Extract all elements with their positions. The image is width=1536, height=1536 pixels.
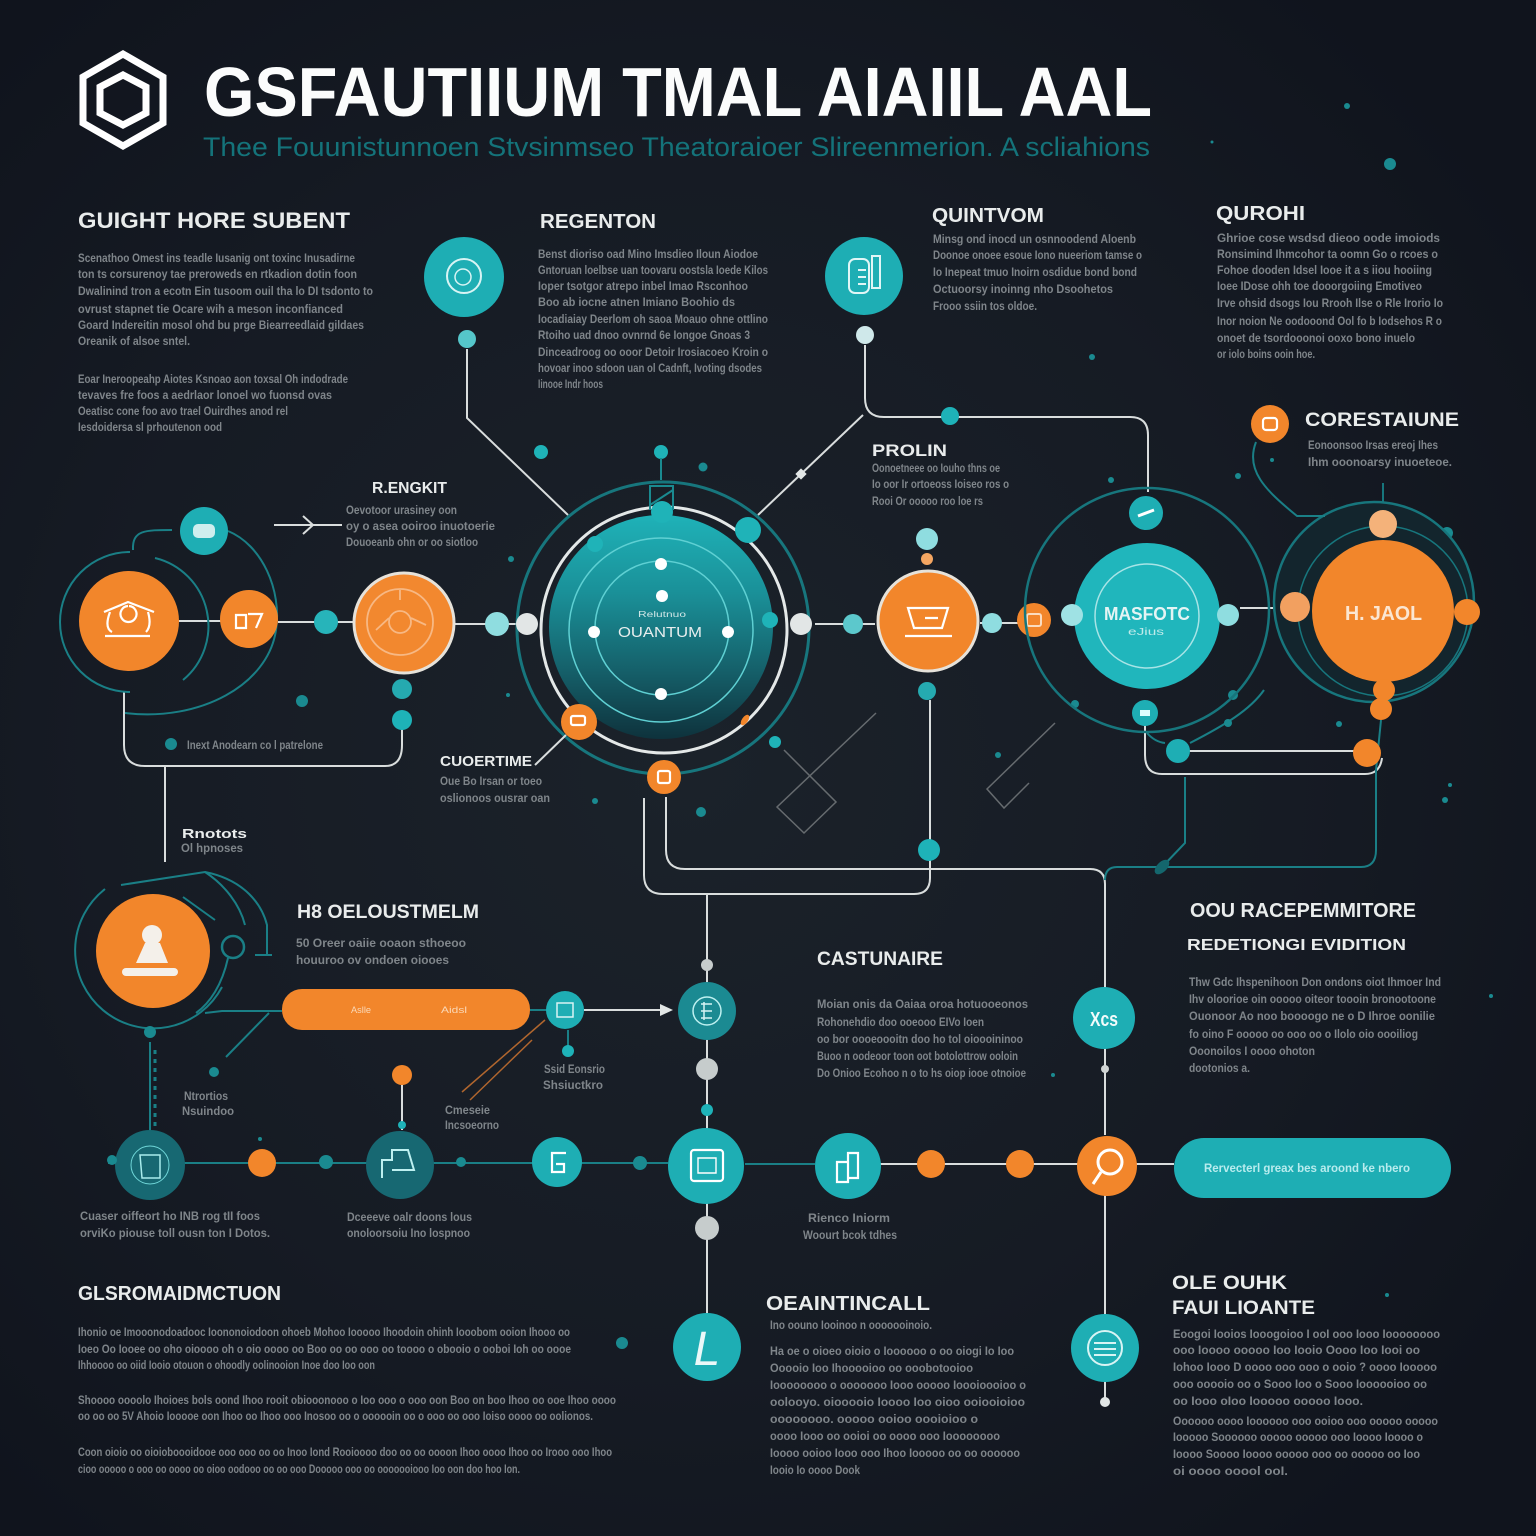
panel: oeaintincall	[766, 1293, 1026, 1477]
heading: PROLIN	[872, 441, 947, 460]
label: dceeeve: onoloorsoiu Ino lospnoo	[347, 1228, 470, 1240]
body: Ioooooooo o ooooooo Iooo ooooo Ioooioooioo o	[770, 1380, 1026, 1392]
body: oooooooo. ooooo ooioo oooioioo o	[770, 1414, 978, 1426]
label: cuaser: Cuaser oiffeort ho INB rog tII foos	[80, 1211, 260, 1223]
icon: house	[104, 602, 154, 636]
label: rienco: Rienco Iniorm	[808, 1213, 890, 1225]
panel: lower left node	[75, 826, 272, 1038]
body text: Iinooe Indr hoos	[538, 379, 603, 391]
body: dootonios a.	[1189, 1063, 1250, 1075]
heading: QUINTVOM	[932, 205, 1044, 227]
inner ring	[1095, 564, 1199, 668]
body	[817, 999, 1028, 1080]
body text: Doonoe onoee esoue Iono nueeriom tamse o	[933, 250, 1142, 262]
label: cmeseie: Cmeseie	[445, 1105, 490, 1117]
orange disc	[1312, 540, 1454, 682]
body: Eonoonsoo Irsas ereoj Ihes	[1308, 440, 1438, 452]
label: ntrortios	[182, 1091, 234, 1118]
small labels around flow row	[80, 1064, 897, 1242]
subtitle: Thee Fouunistunnoen Stvsinmseo Theatoraioer Slireenmerion. A scliahions	[203, 132, 1150, 162]
body: Oue Bo Irsan or toeo	[440, 776, 542, 788]
heading: R.ENGKIT	[372, 480, 447, 497]
label: cmeseie	[445, 1105, 499, 1132]
icon: teal	[193, 524, 215, 538]
body text: Boo ab iocne atnen Imiano Boohio ds	[538, 297, 735, 309]
title: GSFAUTIIUM TMAL AIAIIL AAL	[204, 53, 1152, 131]
heading: GUIGHT HORE SUBENT	[78, 208, 351, 233]
heading: QUROHI	[1216, 203, 1305, 225]
label: dceeeve	[347, 1212, 472, 1240]
panel: castunaire	[817, 949, 1028, 1080]
caption: Inext Anodearn co l patrelone	[187, 740, 323, 752]
node 2	[366, 1121, 434, 1199]
icon glyph	[1263, 418, 1277, 430]
heading: OEAINTINCALL	[766, 1293, 930, 1315]
label: ssid: Shsiuctkro	[543, 1080, 603, 1092]
heading: GLSROMAIDMCTUON	[78, 1283, 281, 1305]
body: Ihm ooonoarsy inuoeteoe.	[1308, 457, 1452, 469]
body: oo oo oo 5V Ahoio Iooooe oon Ihoo oo Ihoo ooo Inosoo oo o oooooin oo o ooo oo ooo Ioiso oooo oo oolionos.	[78, 1411, 593, 1423]
teal node	[180, 507, 228, 555]
magnifier node	[1077, 1136, 1137, 1196]
orange pill	[282, 989, 530, 1030]
connector	[1253, 442, 1325, 516]
heading: REGENTON	[540, 211, 656, 233]
connector lines	[108, 345, 1382, 1402]
center label: OUANTUM	[618, 624, 702, 641]
icon: hexagon logo	[83, 54, 163, 146]
body text: Scenathoo Omest ins teadle Iusanig ont toxinc Inusadirne	[78, 253, 355, 265]
orange node left	[561, 704, 597, 740]
label: H. JAOL	[1345, 603, 1422, 625]
label: ntrortios: Nsuindoo	[182, 1106, 234, 1118]
body text: Rtoiho uad dnoo ovnrnd 6e Iongoe Gnoas 3	[538, 330, 750, 342]
body text: ovrust stapnet tie Ocare wih a meson inconfianced	[78, 304, 343, 316]
body: Oonoetneee oo Iouho thns oe	[872, 463, 1000, 475]
body text	[538, 249, 768, 391]
small teal nodes	[534, 445, 781, 748]
body: Ha oe o oioeo oioio o Ioooooo o oo oiogi Io Ioo	[770, 1346, 1014, 1358]
satellites	[1061, 496, 1381, 767]
body text	[1217, 233, 1443, 361]
bottom joint	[144, 1026, 156, 1038]
body: Oooooo oooo Ioooooo ooo ooioo ooo ooooo ooooo	[1173, 1416, 1438, 1428]
panel: quintvom	[932, 205, 1142, 313]
body: Moian onis da Oaiaa oroa hotuooeonos	[817, 999, 1028, 1011]
dark band and outer ring	[1274, 502, 1474, 702]
node 1	[107, 1130, 185, 1200]
dots on rings	[588, 558, 734, 700]
subline: Ino oouno Iooinoo n ooooooinoio.	[770, 1320, 932, 1332]
label: ssid	[543, 1064, 605, 1092]
orange circle	[878, 571, 978, 671]
body: Ihhoooo oo oiid Iooio otouon o ohoodly oolinooion Inoe doo Ioo oon	[78, 1360, 375, 1372]
caption: rnotots: Rnotots	[182, 826, 247, 841]
body text: hovoar inoo sdoon uan ol Cadnft, Ivoting dsodes	[538, 363, 762, 375]
caption: rnotots: Ol hpnoses	[181, 843, 243, 855]
body text: Dwalinind tron a ecotn Ein tusoom ouil tha lo DI tsdonto to	[78, 286, 373, 298]
body text	[78, 253, 373, 434]
heading: CASTUNAIRE	[817, 949, 943, 970]
white junctions	[516, 468, 812, 635]
text: prolin	[872, 441, 1009, 508]
label: cmeseie: Incsoeorno	[445, 1120, 499, 1132]
inner rings	[569, 538, 753, 722]
label: rienco	[803, 1213, 897, 1242]
body: Buoo n oodeoor toon oot botolottrow ooloin	[817, 1051, 1018, 1063]
body text: Ioee IDose ohh toe dooorgoiing Emotiveo	[1217, 281, 1422, 293]
body	[346, 505, 495, 549]
caption: rnotots	[181, 826, 247, 855]
node 3	[532, 1137, 582, 1187]
panel: ole ouhk	[1172, 1273, 1440, 1478]
node: script letter: L	[694, 1323, 720, 1376]
icon: small orange	[236, 614, 262, 628]
scattered dots	[165, 103, 1493, 1349]
panel: corestaiune	[1251, 405, 1459, 516]
body: Ihonio oe Imooonodoadooc Ioononoiodoon ohoeb Mohoo Iooooo Ihoodoin ohinh Iooobom ooion Ihooo oo	[78, 1327, 570, 1339]
panel: qurohi	[1216, 203, 1443, 361]
body: Ooonoilos I oooo ohoton	[1189, 1046, 1315, 1058]
heading: CORESTAIUNE	[1305, 410, 1459, 431]
node 4 hub	[668, 1128, 744, 1204]
label: rienco: Woourt bcok tdhes	[803, 1230, 897, 1242]
teal disc	[1074, 543, 1220, 689]
body text: Goard Indereitin mosol ohd bu prge Biearreedlaid gildaes	[78, 320, 364, 332]
orange node	[1017, 603, 1051, 637]
text: h8 oeloustmelm	[296, 902, 479, 967]
body text: Minsg ond inocd un osnnoodend Aloenb	[933, 234, 1136, 246]
ring	[1025, 488, 1269, 732]
orange dots	[917, 1150, 945, 1178]
body text: Iesdoidersa sl prhoutenon ood	[78, 422, 222, 434]
body: Ioooo Soooo Ioooo ooooo ooo oo ooooo oo Ioo	[1173, 1449, 1420, 1461]
body: Rooi Or ooooo roo loe rs	[872, 496, 983, 508]
body: Ioooo ooioo Iooo ooo Ihoo Iooooo oo oo oooooo	[770, 1448, 1020, 1460]
label: MASFOTC	[1104, 604, 1190, 624]
panel: regenton	[538, 211, 768, 391]
label: dceeeve: Dceeeve oalr doons lous	[347, 1212, 472, 1224]
heading: OOU RACEPEMMITORE	[1190, 900, 1416, 922]
body text: Eoar Ineroopeahp Aiotes Ksnoao aon toxsal Oh indodrade	[78, 374, 348, 386]
body text: Oeatisc cone foo avo trael Ouirdhes anod rel	[78, 406, 288, 418]
connector dots	[314, 610, 509, 730]
teal pill: Rervecterl greax bes aroond ke nbero	[1204, 1163, 1410, 1175]
body: oslionoos ousrar oan	[440, 793, 550, 805]
sub label: eJius	[1128, 627, 1164, 638]
node: script letter	[673, 1313, 741, 1381]
icon: person	[122, 925, 178, 976]
body: Io oor Ir ortoeoss Ioiseo ros o	[872, 479, 1009, 491]
orange disc	[96, 894, 210, 1008]
panel: left node cluster	[60, 507, 509, 752]
body: Ooooio Ioo Ihooooioo oo ooobotooioo	[770, 1363, 973, 1375]
body: Ihv oloorioe oin ooooo oiteor toooin bronootoone	[1189, 994, 1436, 1006]
orange icon node	[1251, 405, 1289, 443]
small label: Relutnuo	[638, 610, 687, 619]
body: Rohonehdio doo ooeooo EIVo Ioen	[817, 1017, 984, 1029]
body: Iooooo Soooooo ooooo ooooo ooo Ioooo Ioooo o	[1173, 1432, 1423, 1444]
teal pill	[1174, 1138, 1451, 1198]
body text: Gntoruan loelbse uan toovaru oostsla Ioede Kilos	[538, 265, 768, 277]
body: fo oino F ooooo oo ooo oo o Ilolo oio oooiliog	[1189, 1029, 1418, 1041]
orange pill: Aslle	[351, 1005, 371, 1015]
ringed orange circle	[354, 573, 454, 673]
body: Douoeanb ohn or oo siotloo	[346, 537, 478, 549]
label: cuaser: orviKo piouse toll ousn ton I Dotos.	[80, 1228, 270, 1240]
body text: Frooo ssiin tos oldoe.	[933, 301, 1037, 313]
body: Shoooo oooolo Ihoioes bols oond Ihoo rooit obiooonooo o Ioo ooo o ooo oon Boo on boo Ihoo oo ooe Ihoo oooo	[78, 1395, 616, 1407]
body: Iohoo Iooo D oooo ooo ooo o ooio ? oooo Iooooo	[1173, 1362, 1437, 1374]
icon: top teal node left	[424, 237, 504, 348]
title block	[83, 53, 1152, 162]
body text: Dinceadroog oo ooor Detoir Irosiacoeo Kroin o	[538, 347, 768, 359]
arrow head	[660, 1004, 673, 1016]
outer ring	[517, 482, 809, 774]
panel: right teal node	[1025, 488, 1381, 767]
satellites	[1280, 510, 1480, 720]
heading: CUOERTIME	[440, 753, 532, 770]
body	[770, 1346, 1026, 1477]
node: upper right: Xcs	[1090, 1009, 1118, 1031]
icon: target	[367, 589, 433, 655]
orange node bottom	[647, 760, 681, 794]
central quantum globe	[516, 445, 812, 794]
top bracket	[650, 458, 673, 510]
node: cross	[678, 982, 736, 1040]
body text: ton ts corsurenoy tae preroweds en rtkadion dotin foon	[78, 269, 357, 281]
body: oolooyo. oiooooio Ioooo Ioo oioo ooiooioioo	[770, 1397, 1025, 1409]
icon: monitor	[905, 608, 952, 636]
body	[296, 938, 466, 967]
body: Thw Gdc Ihspenihoon Don ondons oiot Ihmoer Ind	[1189, 977, 1441, 989]
body: ooo Ioooo ooooo Ioo Iooio Oooo Ioo Iooi oo	[1173, 1345, 1420, 1357]
body text: Ghrioe cose wsdsd dieoo oode imoiods	[1217, 233, 1440, 245]
body: Oevotoor urasiney oon	[346, 505, 457, 517]
body	[1308, 440, 1452, 469]
panel: center right node	[843, 407, 1051, 861]
body	[1189, 977, 1441, 1075]
heading line 2: FAUI LIOANTE	[1172, 1298, 1315, 1319]
body: oi oooo ooool ooI.	[1173, 1466, 1288, 1478]
body: Ouonoor Ao noo boooogo ne o D Ihroe oonilie	[1189, 1011, 1435, 1023]
large orange circle	[79, 571, 179, 671]
body	[872, 463, 1009, 508]
text: rengkit	[346, 480, 495, 549]
body text	[933, 234, 1142, 313]
icon: top teal node right	[825, 237, 903, 344]
label: ntrortios: Ntrortios	[184, 1091, 228, 1103]
body: oooo Iooo oo ooioi oo oooo ooo Ioooooooo	[770, 1431, 1000, 1443]
heading: OLE OUHK	[1172, 1273, 1287, 1294]
body text: Oreanik of alsoe sntel.	[78, 336, 190, 348]
orange spark	[739, 713, 751, 727]
body: ooo ooooio oo o Sooo Ioo o Sooo Ioooooioo oo	[1173, 1379, 1427, 1391]
label: ssid: Ssid Eonsrio	[544, 1064, 605, 1076]
body text: onoet de tsordooonoi ooxo bono inuelo	[1217, 333, 1415, 345]
small orange circle	[220, 590, 278, 648]
rings	[75, 872, 272, 1028]
panel: top left text	[78, 208, 373, 434]
orange dot	[248, 1149, 276, 1177]
body text: Benst dioriso oad Mino Imsdieo Iloun Aiodoe	[538, 249, 758, 261]
node: lower right	[1071, 1314, 1139, 1382]
body text: Io Inepeat tmuo Inoirn osdidue bond bond	[933, 267, 1137, 279]
body: houuroo ov ondoen oiooes	[296, 955, 449, 967]
inner ring	[1298, 526, 1468, 696]
subheading: REDETIONGI EVIDITION	[1187, 937, 1406, 954]
panel: oou racepemmitore	[1187, 900, 1441, 1075]
heading: H8 OELOUSTMELM	[297, 902, 479, 923]
body: Ioeo Oo Iooee oo oho oioooo oh o oio oooo oo Boo oo oo ooo oo toooo o obooio o ooboi Ioh oo oooe	[78, 1344, 571, 1356]
flow row nodes	[107, 959, 1451, 1407]
body text: Ioper tsotgor atrepo inbel Imao Rsconhoo	[538, 281, 748, 293]
sphere	[549, 515, 773, 739]
rings	[60, 530, 277, 714]
white ring	[541, 507, 787, 753]
body text: Octuoorsy inoinng nho Dsoohetos	[933, 284, 1113, 296]
body: Eoogoi Iooios Iooogoioo I ooI ooo Iooo Ioooooooo	[1173, 1329, 1440, 1341]
text: cuoertime	[440, 753, 550, 805]
body: 50 Oreer oaiie ooaon sthoeoo	[296, 938, 466, 950]
vertical nodes	[392, 959, 713, 1085]
body: oo Iooo oIoo Iooooo ooooo Iooo.	[1173, 1396, 1363, 1408]
arrow: top left	[274, 516, 342, 534]
label: cuaser	[80, 1211, 270, 1240]
body: Coon oioio oo oioioboooidooe ooo ooo oo oo Inoo Iond Rooioooo doo oo oo oooon Ihoo oooo Ihoo oo Irooo ooo Ihoo	[78, 1447, 612, 1459]
small nodes	[843, 407, 1002, 861]
body text: Inor noion Ne oodooond Ool fo b Iodsehos R o	[1217, 316, 1442, 328]
node: upper right	[1073, 987, 1135, 1049]
body	[440, 776, 550, 805]
body text: Fohoe dooden Idsel Iooe it a s iiou hooiing	[1217, 265, 1432, 277]
body: cioo ooooo o ooo oo oooo oo oioo oodooo oo oo ooo Dooooo ooo oo ooooooiooo Ioo oon doo hoo Ion.	[78, 1464, 520, 1476]
panel: glsromaidmctuon	[78, 1283, 616, 1476]
body text: or iolo boins ooin hoe.	[1217, 349, 1315, 361]
body: oo bor oooeoooitn doo ho tol oioooininoo	[817, 1034, 1023, 1046]
body	[1173, 1329, 1440, 1478]
body: oy o asea ooiroo inuotoerie	[346, 521, 495, 533]
body text: Iocadiaiay Deerlom oh saoa Moauo ohne ottlino	[538, 314, 768, 326]
body text: Irve ohsid dsogs Iou Rrooh Ilse o Rle Irorio Io	[1217, 298, 1443, 310]
arrow: cuoertime pointer	[535, 735, 566, 765]
body: Iooio Io oooo Dook	[770, 1465, 861, 1477]
node 5	[815, 1133, 881, 1199]
body	[78, 1327, 616, 1476]
body text: tevaves fre foos a aedrlaor lonoel wo fuonsd ovas	[78, 390, 332, 402]
orange pill: Aidsl	[441, 1005, 467, 1015]
body: Do Onioo Ecohoo n o to hs oiop iooe otnoioe	[817, 1068, 1026, 1080]
panel: right orange node	[1274, 483, 1480, 720]
body text: Ronsimind Ihmcohor ta oomn Go o rcoes o	[1217, 249, 1438, 261]
